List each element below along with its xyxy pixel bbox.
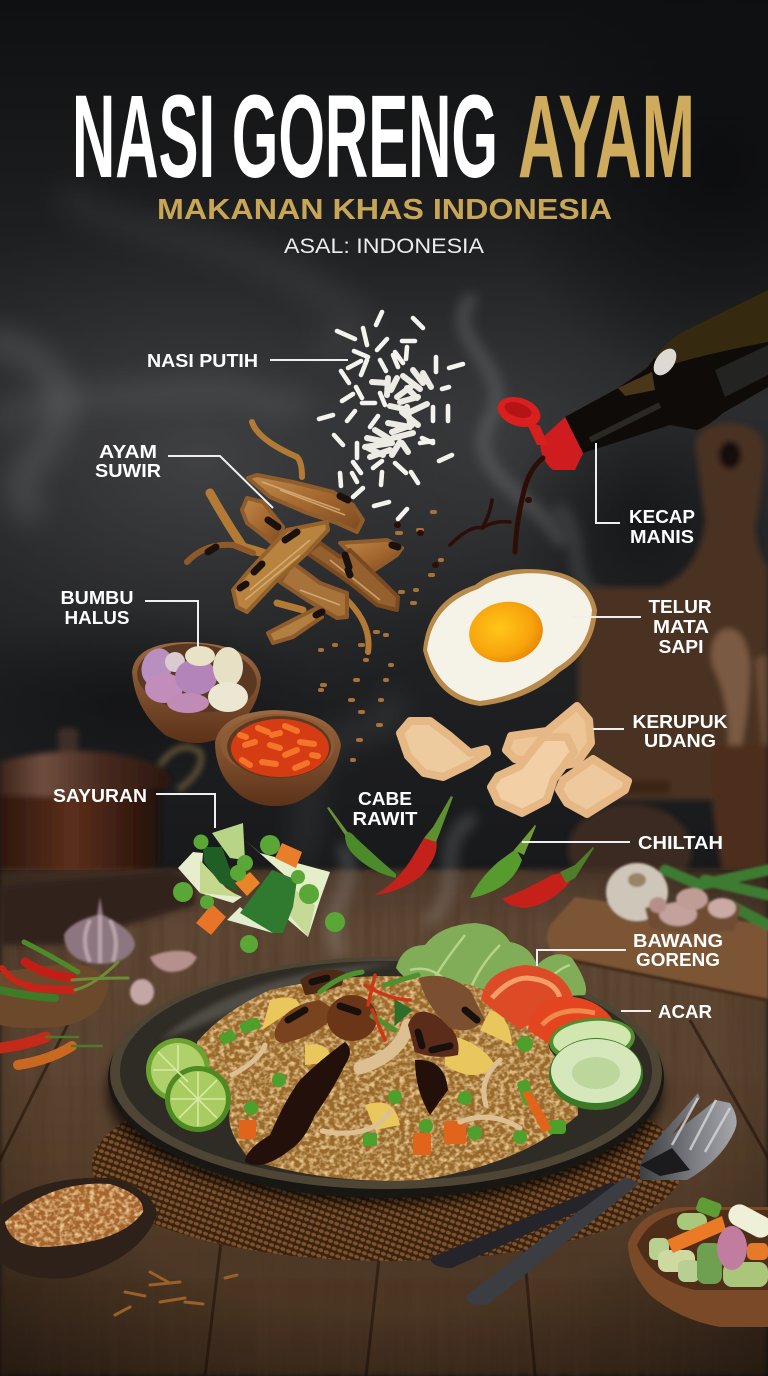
ingredient: kecap manis bottle: [494, 290, 768, 470]
lime slices: [146, 1038, 231, 1132]
label: kerupuk udang: UDANG: [644, 730, 716, 751]
ingredient: cabe rawit chilies: [327, 796, 594, 908]
label: acar: ACAR: [658, 1001, 712, 1022]
label: chiltah: CHILTAH: [638, 832, 723, 853]
fried rice: [197, 976, 578, 1181]
fried rice garnish: peas, carrots, egg: [219, 997, 566, 1155]
background: dark board at left: [0, 870, 196, 945]
label: telur mata sapi: [572, 596, 712, 657]
label: kecap manis: [596, 443, 695, 547]
ingredient: floating rice: [319, 312, 463, 519]
ingredient: kecap manis stream: [397, 458, 543, 565]
lettuce: [396, 923, 586, 1000]
label: sayuran: SAYURAN: [53, 785, 147, 806]
label: bawang goreng: [537, 930, 723, 970]
subtitle: MAKANAN KHAS INDONESIA: [157, 194, 612, 226]
origin line: ASAL: INDONESIA: [284, 235, 484, 258]
wooden table: [0, 870, 768, 1376]
background: cutting board at right with garlic and beans: [547, 863, 768, 1000]
grilled chicken on rice: [274, 970, 485, 1057]
label: kerupuk udang: [593, 711, 728, 751]
ingredient: kerupuk udang: [400, 706, 628, 814]
label: bumbu halus: BUMBU: [60, 587, 134, 608]
placemat: [92, 1069, 684, 1261]
fork and spoon: [430, 1093, 737, 1305]
label: kecap manis: KECAP: [629, 506, 695, 527]
label: cabe rawit: [352, 788, 418, 829]
left table: garlic and chili dish: [0, 897, 197, 1065]
steam rising over plate: [334, 820, 470, 950]
label: bumbu halus: HALUS: [64, 607, 130, 628]
label: nasi putih: NASI PUTIH: [147, 350, 258, 371]
ingredient: sambal bowl: [215, 710, 341, 806]
ingredient: shallot and garlic bowl: [132, 638, 261, 743]
label: cabe rawit: CABE: [358, 788, 412, 809]
label: acar: [621, 1001, 712, 1022]
label: kerupuk udang: KERUPUK: [632, 711, 728, 732]
ingredient: fried egg: [423, 569, 597, 706]
background: wooden cutting board and utensils: [568, 423, 768, 896]
label: ayam suwir: [95, 441, 273, 508]
label: ayam suwir: SUWIR: [95, 460, 161, 481]
plate: [107, 957, 664, 1204]
label: bawang goreng: BAWANG: [633, 930, 723, 951]
label: cabe rawit: RAWIT: [352, 808, 418, 829]
background: dark smoky wall: [0, 0, 768, 900]
particles: spice crumbs: [320, 512, 442, 760]
label: bawang goreng: GORENG: [636, 949, 720, 970]
label: kecap manis: MANIS: [630, 526, 694, 547]
label: telur mata sapi: TELUR: [648, 596, 712, 617]
label: telur mata sapi: SAPI: [658, 636, 704, 657]
bowl of acar pickles: [628, 1196, 768, 1327]
tomato slices: [481, 965, 614, 1046]
label: ayam suwir: AYAM: [99, 441, 157, 462]
background: copper pot: [0, 728, 201, 888]
herbs and chili on chicken: [320, 972, 418, 1040]
ingredient: suwir chicken: [187, 422, 402, 652]
label: telur mata sapi: MATA: [653, 616, 709, 637]
label: bumbu halus: [60, 587, 198, 647]
cucumber slices: [547, 1014, 643, 1110]
bowl of fried shallots: [0, 1178, 237, 1315]
label: sayuran: [53, 785, 215, 828]
kecap manis drizzle on rice: [245, 1042, 448, 1165]
ingredient: sayuran vegetables: [173, 823, 345, 953]
